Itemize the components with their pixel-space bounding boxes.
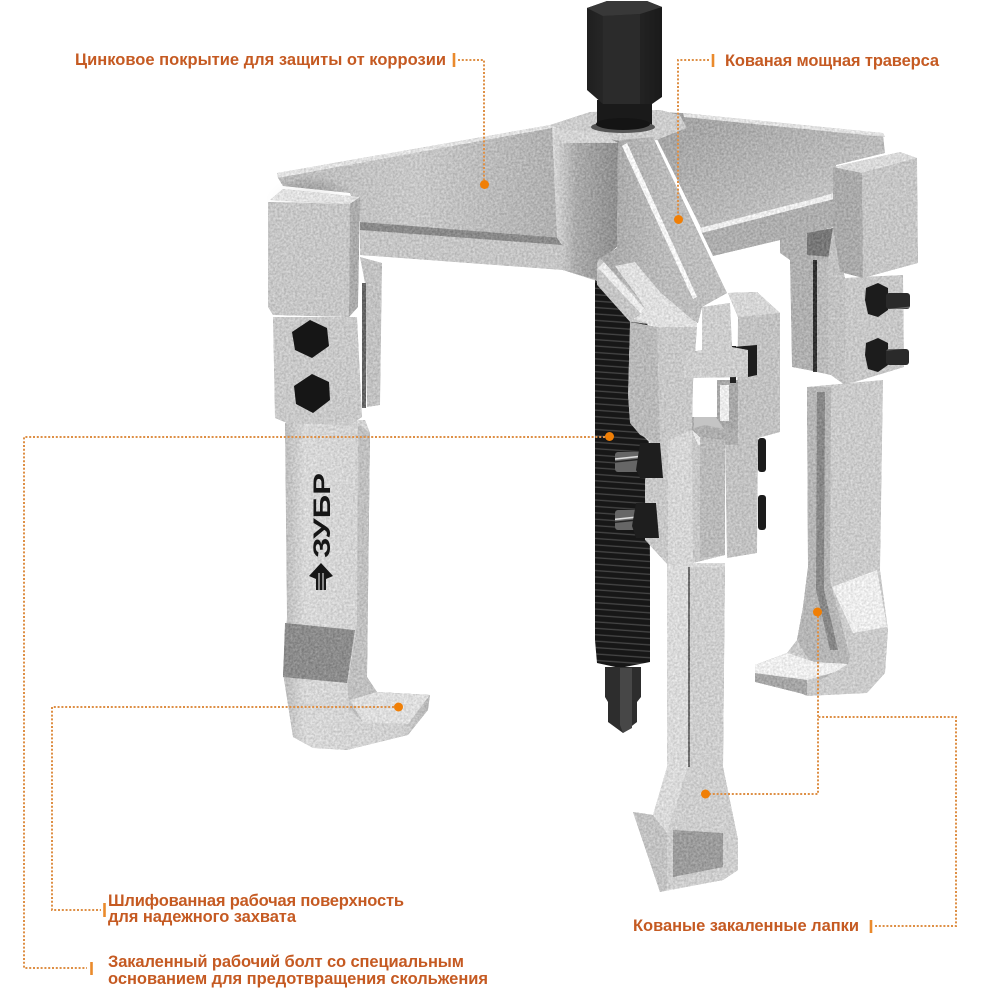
left arm	[283, 420, 430, 750]
threaded bolt	[595, 280, 650, 733]
crown of traverse	[550, 110, 687, 143]
right bolts	[865, 283, 910, 372]
lower arm of traverse	[597, 258, 657, 325]
front jaw arm	[633, 563, 738, 892]
logo: ЗУБР	[309, 473, 336, 590]
rear strip of left jaw	[360, 257, 382, 408]
callout: ground working surface: для надежного захвата	[108, 908, 297, 926]
front jaw body	[628, 302, 725, 565]
rear right arm	[755, 380, 888, 696]
dark slot behind T-piece	[730, 345, 757, 383]
callout: ground working surface: Шлифованная рабочая поверхность	[108, 892, 404, 910]
callout: ground working surface	[52, 702, 404, 926]
callout: hardened working bolt: основанием для предотвращения скольжения	[108, 970, 488, 988]
left hex bolts	[292, 320, 330, 413]
hex head of bolt	[587, 1, 662, 133]
front strut of traverse	[600, 137, 727, 325]
callout: forged traverse	[674, 52, 940, 224]
rear bolts of front jaw	[758, 438, 766, 530]
callout: hardened working bolt	[24, 432, 614, 988]
rear right plate	[655, 112, 885, 256]
left slider	[273, 317, 362, 425]
front T-piece	[683, 303, 748, 378]
rear right slider with bolts	[828, 227, 904, 385]
callout: hardened working bolt: Закаленный рабочий болт со специальным	[108, 953, 464, 971]
rear right block	[833, 152, 918, 278]
illustration: three-jaw puller	[265, 1, 918, 892]
front jaw bolts	[615, 443, 663, 538]
rear right guide strip	[780, 228, 833, 375]
logo: ЗУБР: ЗУБР	[309, 473, 336, 558]
callout: zinc coating: Цинковое покрытие для защиты от коррозии	[75, 51, 446, 69]
callout: forged traverse: Кованая мощная траверса	[725, 52, 940, 70]
callout: forged hardened jaws: Кованые закаленные лапки	[633, 917, 859, 935]
callout: forged hardened jaws	[633, 608, 956, 935]
rear middle block of front jaw	[692, 292, 780, 558]
callout: zinc coating	[75, 51, 489, 189]
window in front jaw	[694, 381, 724, 429]
left plate of traverse	[265, 125, 597, 281]
central column	[552, 128, 620, 280]
left block	[268, 189, 360, 317]
